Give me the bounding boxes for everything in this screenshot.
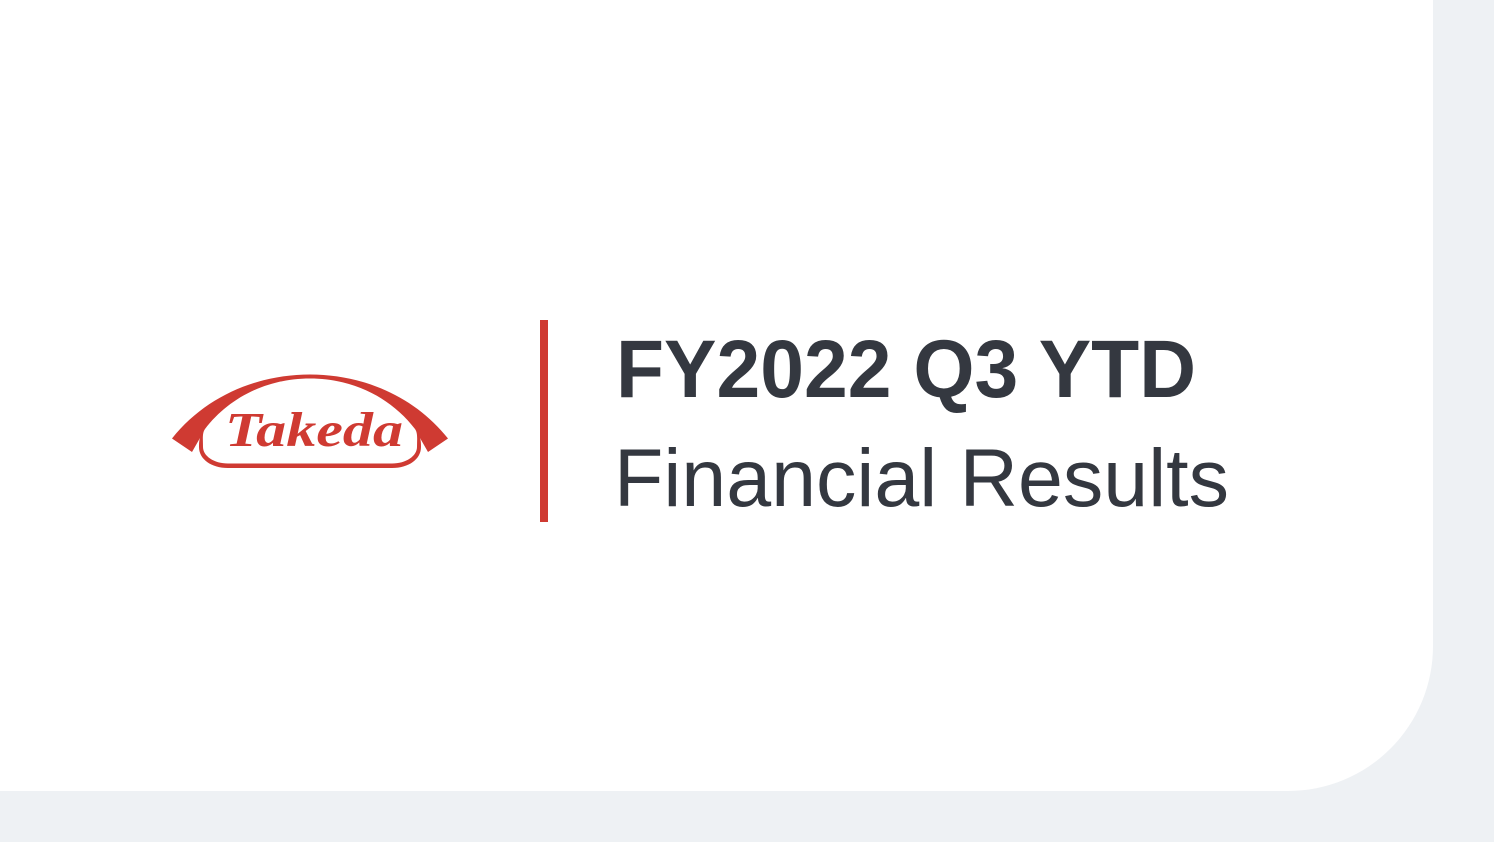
logo arch and capsule [172,374,448,468]
subtitle: Financial Results [614,433,1229,524]
Takeda logo [172,374,448,468]
logo wordmark: Takeda [225,402,403,457]
title: FY2022 Q3 YTD [616,324,1196,415]
red vertical divider [540,320,548,522]
